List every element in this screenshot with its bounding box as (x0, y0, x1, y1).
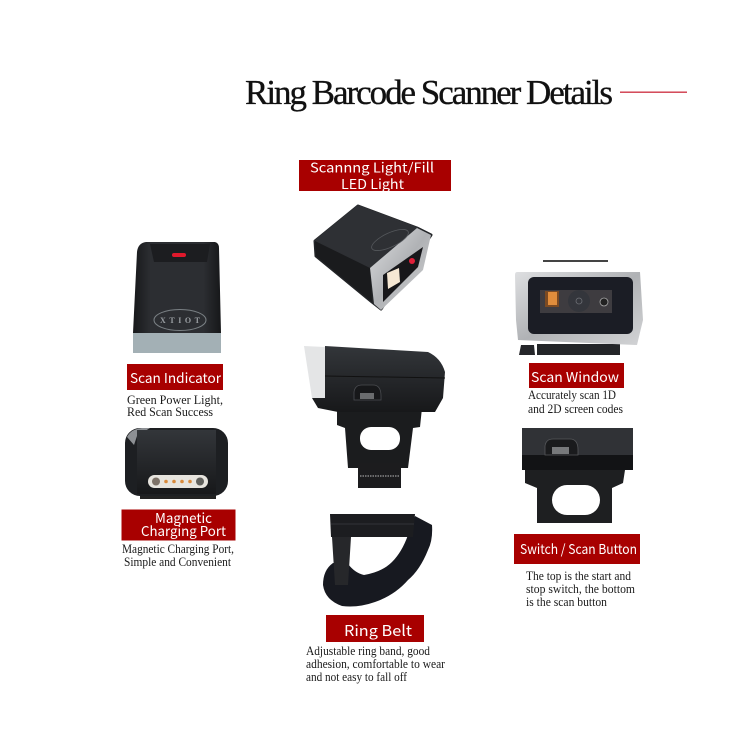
label: magnetic charging port (122, 507, 236, 540)
text: switch description (526, 568, 635, 609)
label: scan window: Scan Window (531, 366, 619, 386)
icon: ring scanner side view (304, 346, 445, 488)
text: magnetic charging description: Magnetic Charging Port, (122, 541, 234, 556)
label: scanning light (299, 156, 451, 193)
text: ring belt description: adhesion, comfortable to wear (306, 656, 446, 671)
panel: scan indicator (127, 242, 223, 419)
icon: charging port view (125, 428, 228, 499)
icon: ring belt strap (323, 514, 432, 606)
text: magnetic charging description (122, 541, 234, 569)
panel: ring belt (306, 514, 446, 684)
label: ring belt (326, 615, 424, 642)
icon: scanner front angle view (315, 206, 431, 310)
text: scan window description: and 2D screen codes (528, 401, 623, 416)
panel: side view (304, 346, 445, 488)
label: magnetic charging port: Magnetic (155, 507, 212, 527)
icon: scanner top view (133, 242, 221, 353)
text: switch description: The top is the start and (526, 568, 631, 583)
text: scan indicator description: Green Power Light, (127, 392, 223, 407)
title accent line (620, 92, 687, 93)
label: ring belt: Ring Belt (344, 620, 412, 641)
text: scan window description: Accurately scan 1D (528, 387, 616, 402)
panel: switch and scan button (514, 428, 640, 609)
text: ring belt description (306, 643, 446, 684)
text: magnetic charging description: Simple and Convenient (124, 554, 231, 569)
text: ring belt description: Adjustable ring band, good (306, 643, 430, 658)
text: scan indicator description: Red Scan Success (127, 404, 213, 419)
panel: scan window (515, 260, 643, 416)
label: switch scan button: Switch / Scan Button (520, 538, 637, 558)
label: scanning light: LED Light (341, 173, 404, 193)
label: scan indicator: Scan Indicator (130, 367, 222, 387)
text: scan indicator description (127, 392, 223, 419)
icon: scan window front view (515, 260, 643, 355)
panel: magnetic charging port (122, 428, 236, 569)
icon: scanner top view: XTIOT (160, 316, 201, 325)
text: switch description: stop switch, the bottom (526, 581, 635, 596)
label: switch scan button (514, 534, 640, 564)
text: scan window description (528, 387, 623, 416)
icon: switch close-up (522, 428, 633, 523)
panel: scanning light (299, 156, 451, 310)
label: magnetic charging port: Charging Port (141, 520, 226, 540)
text: switch description: is the scan button (526, 594, 607, 609)
text: ring belt description: and not easy to fall off (306, 669, 408, 684)
title: Ring Barcode Scanner Details (245, 73, 613, 112)
label: scanning light: Scannng Light/Fill (310, 156, 434, 176)
